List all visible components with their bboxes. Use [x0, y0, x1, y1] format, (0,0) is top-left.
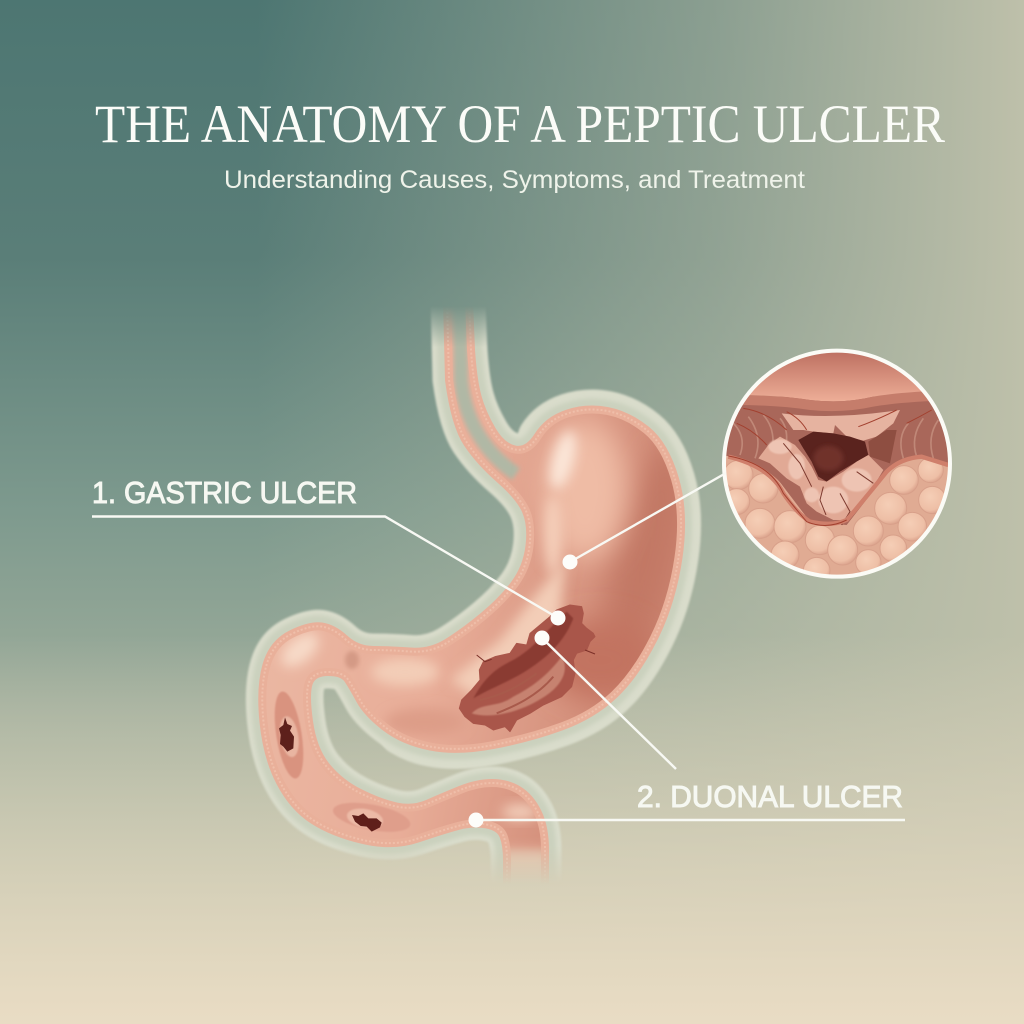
tissue base: [726, 392, 948, 575]
torn lower lining: [758, 437, 883, 520]
title: THE ANATOMY OF A PEPTIC ULCLER: [95, 94, 945, 154]
gastric ulcer crater: [459, 605, 595, 732]
leader line to duodenum: [476, 819, 905, 821]
marker dot: [562, 554, 578, 570]
muscle ribs: [733, 415, 938, 458]
lens ring: [724, 351, 950, 577]
magnified ulcer callout: [720, 347, 960, 584]
duodenal ulcer lower: [333, 802, 410, 832]
crater shadow: [868, 430, 897, 463]
outer translucent halo: [262, 300, 681, 890]
top surface: [753, 352, 921, 402]
fat cells: [726, 460, 944, 574]
label: gastric ulcer: [92, 475, 566, 626]
duodenal ulcer upper: [274, 691, 304, 779]
label text: 2. DUONAL ULCER: [637, 779, 903, 814]
stomach wall: [262, 300, 681, 890]
crater: [798, 432, 868, 482]
label: duodenal ulcer: [468, 630, 905, 828]
organ interior: [266, 316, 678, 874]
submucosa edge: [728, 457, 948, 524]
red vessels: [728, 408, 932, 525]
stomach and duodenum illustration: [262, 300, 703, 900]
marker dot duodenum: [468, 812, 484, 828]
leader line to stomach: [542, 638, 676, 769]
torn upper lining: [782, 410, 900, 441]
callout leader line: [562, 473, 726, 570]
marker dot stomach: [534, 630, 550, 646]
esophagus lumen: [460, 300, 516, 474]
mucosa band: [743, 392, 928, 411]
leader line: [92, 516, 558, 618]
subtitle: Understanding Causes, Symptoms, and Treatment: [224, 166, 805, 194]
label text: 1. GASTRIC ULCER: [92, 475, 357, 510]
muscular layer: [720, 397, 957, 525]
marker dot: [550, 610, 566, 626]
